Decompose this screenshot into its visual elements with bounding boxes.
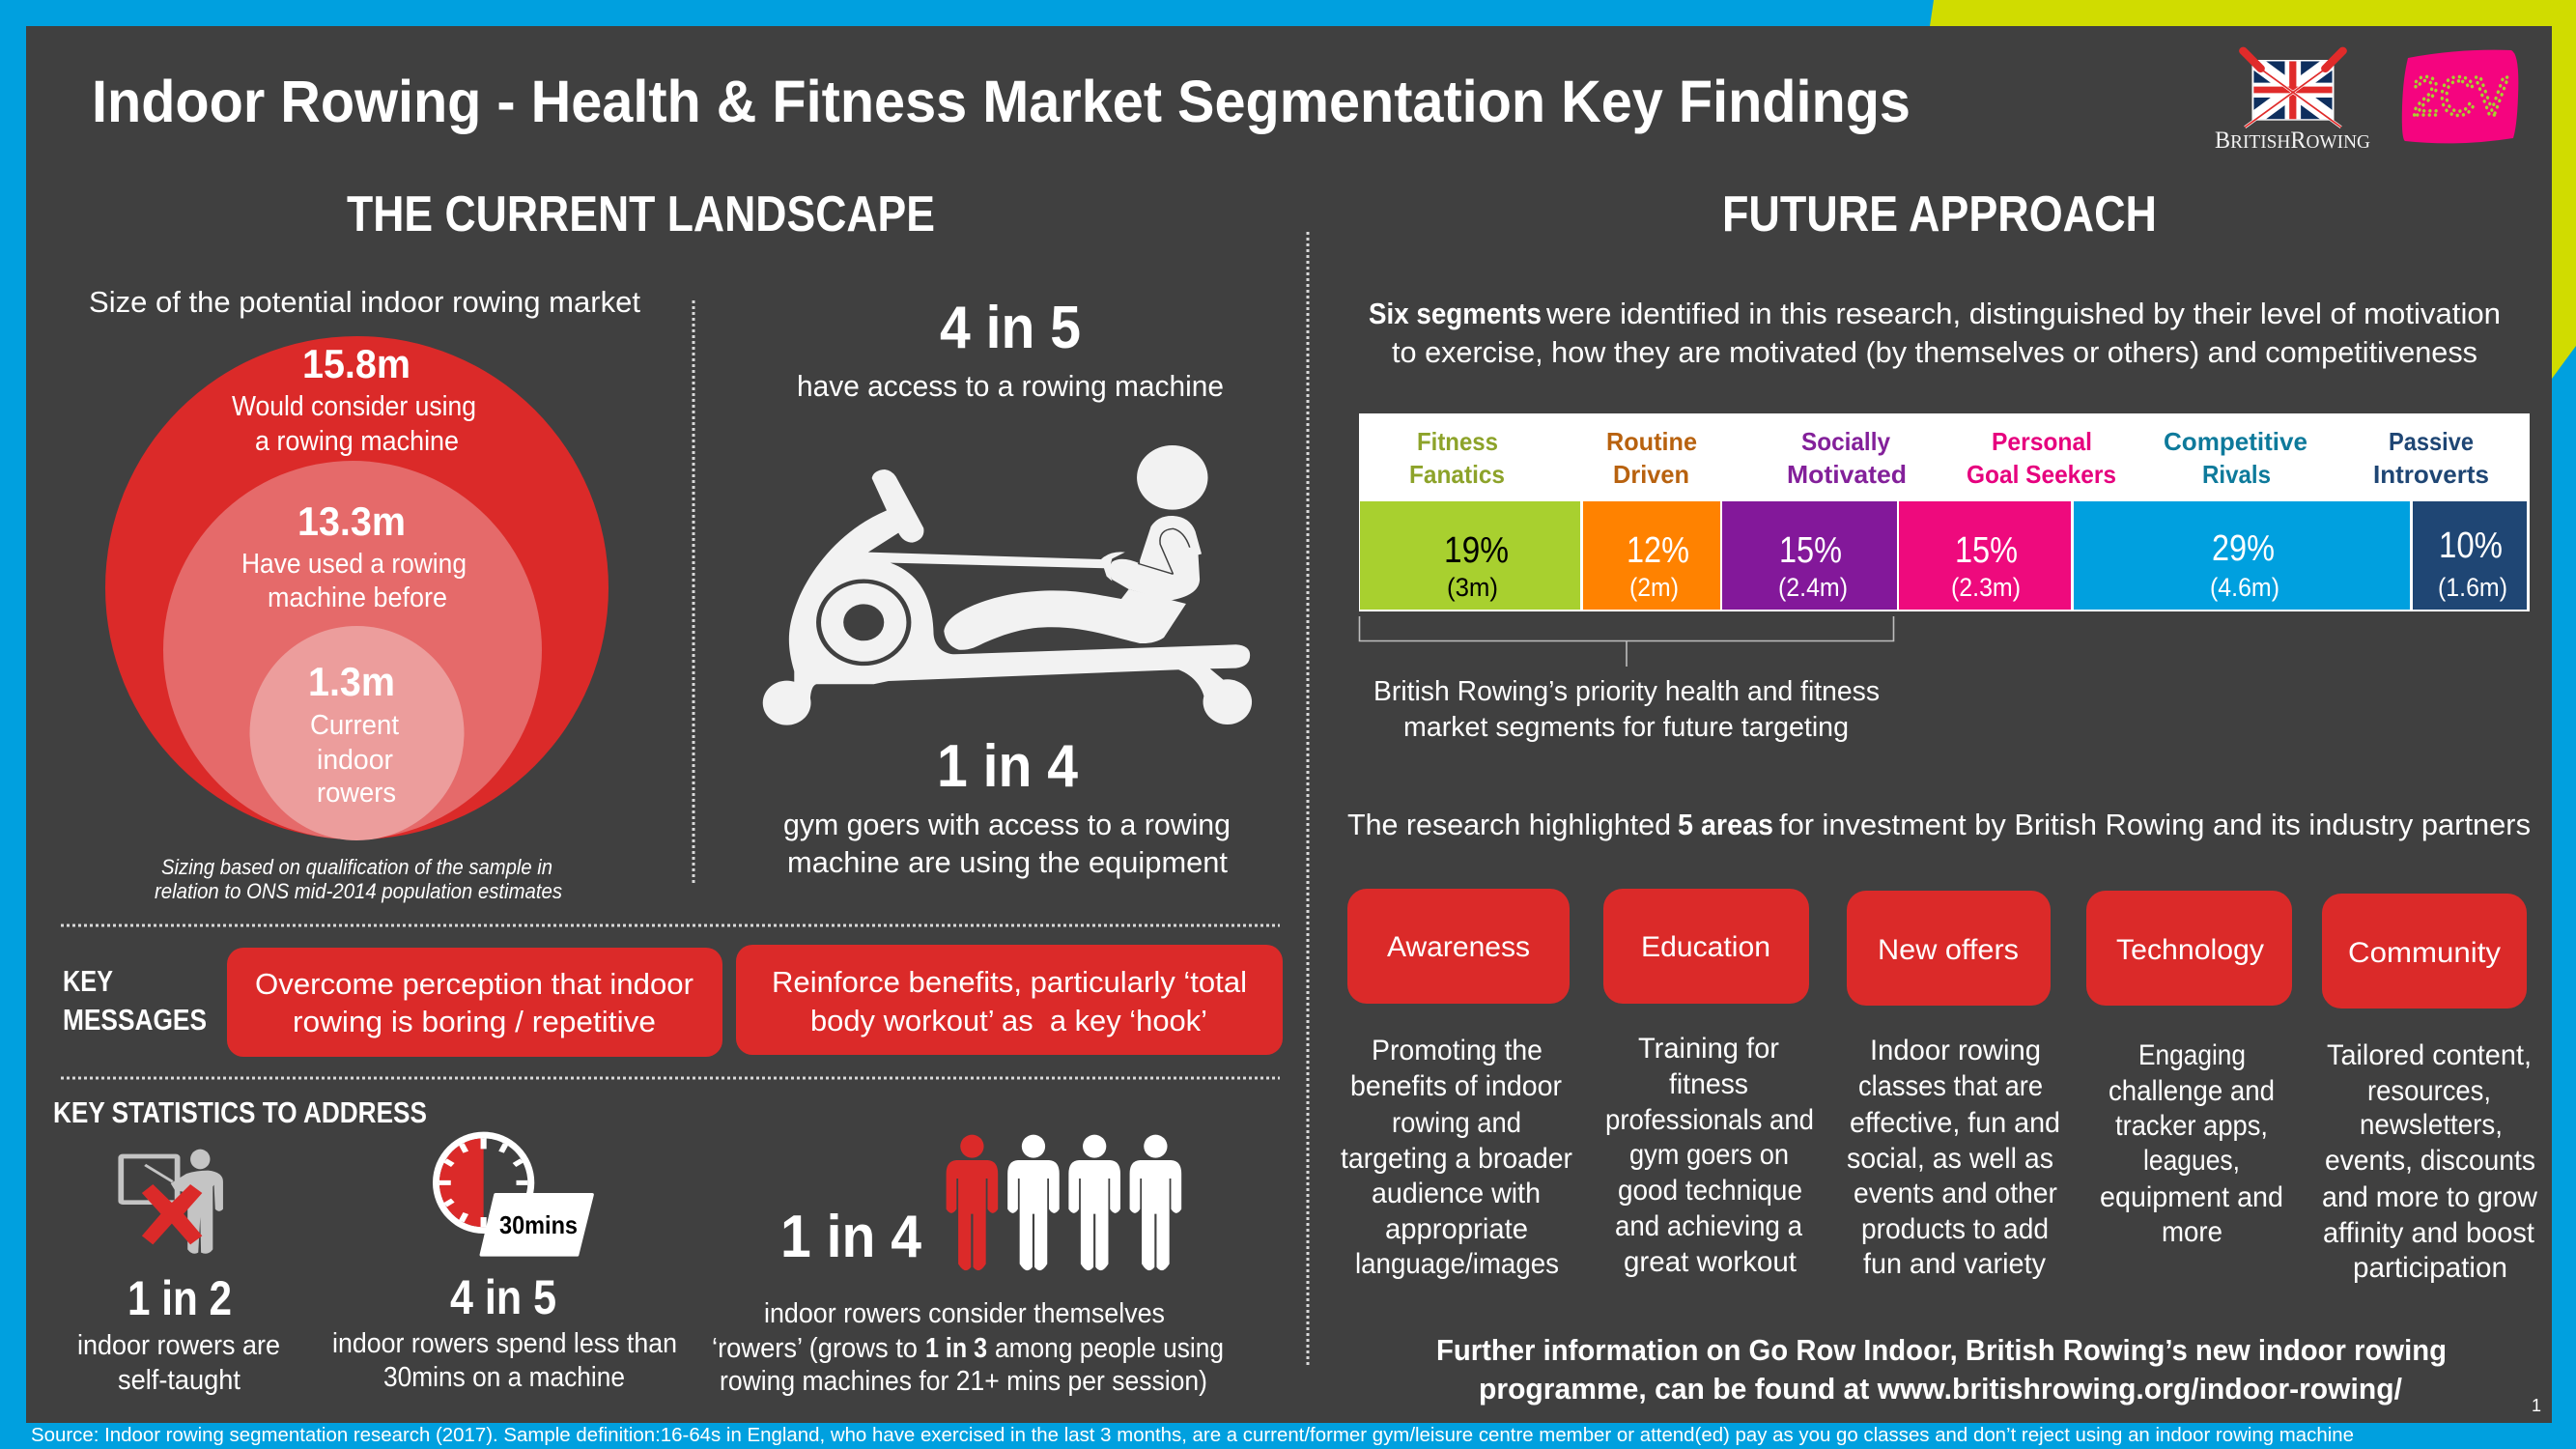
segment: routine driven: 12%: [1627, 530, 1689, 571]
segment: socially motivated: Socially: [1801, 427, 1890, 456]
further information: Further information on Go Row Indoor, British Rowing’s new indoor rowing: [1436, 1333, 2447, 1367]
panel: community: resources,: [2367, 1075, 2491, 1107]
research areas intro: for investment by British Rowing and its industry partners: [1779, 808, 2531, 841]
panel: technology: Technology: [2116, 934, 2264, 966]
panel: awareness: targeting a broader: [1341, 1143, 1572, 1175]
icon: teacher crossed out: [121, 1150, 223, 1254]
footnote: [155, 855, 562, 903]
panel: new offers: classes that are: [1858, 1070, 2043, 1102]
panel: education: [1603, 889, 1814, 1278]
heading: the current landscape: THE CURRENT LANDSCAPE: [347, 186, 935, 242]
stat: 1 in 2 self-taught: [77, 1271, 280, 1396]
circle: 13.3m: 13.3m: [297, 498, 406, 544]
research areas intro: The research highlighted: [1347, 808, 1671, 841]
panel: education: great workout: [1624, 1246, 1798, 1278]
stat: 4 in 5 less than 30mins: indoor rowers spend less than: [332, 1328, 677, 1359]
panel: awareness: [1341, 889, 1572, 1280]
panel: education: professionals and: [1605, 1104, 1814, 1136]
panel: community: newsletters,: [2360, 1109, 2503, 1141]
key message: benefits: body workout’ as a key ‘hook’: [810, 1004, 1207, 1037]
research areas intro: [1347, 808, 2531, 841]
key messages label: KEY: [63, 964, 113, 998]
icon: stopwatch with 30mins tag: 30mins: [499, 1210, 578, 1239]
panel: technology: challenge and: [2109, 1075, 2275, 1107]
key message: boring: Overcome perception that indoor: [255, 967, 694, 1001]
segment: passive introverts: Passive: [2389, 427, 2474, 456]
title: Indoor Rowing - Health & Fitness Market Segmentation Key Findings: [92, 69, 1911, 134]
panel: awareness: language/images: [1355, 1248, 1559, 1280]
circle: 15.8m: 15.8m: [302, 341, 410, 386]
panel: technology: [2086, 891, 2292, 1248]
panel: education: and achieving a: [1615, 1210, 1802, 1242]
segment: routine driven: Driven: [1613, 460, 1689, 489]
further information: programme, can be found at www.britishrowing.org/indoor-rowing/: [1479, 1372, 2402, 1406]
segment: competitive rivals: (4.6m): [2210, 573, 2279, 602]
stat: 1 in 4 gym goers: gym goers with access to a rowing: [783, 808, 1231, 841]
circle: 1.3m: 1.3m: [308, 659, 395, 704]
panel: new offers: social, as well as: [1847, 1143, 2053, 1175]
footnote: Sizing based on qualification of the sample in: [161, 855, 552, 879]
stat: 1 in 4 gym goers: machine are using the equipment: [787, 845, 1228, 879]
key message: benefits: [736, 945, 1283, 1055]
circle: 1.3m: [249, 626, 464, 840]
key messages label: MESSAGES: [63, 1003, 207, 1037]
panel: awareness: Promoting the: [1372, 1035, 1543, 1066]
stat: 1 in 4 consider themselves rowers: indoor rowers consider themselves: [764, 1298, 1165, 1329]
segment: routine driven: (2m): [1629, 573, 1679, 602]
panel: community: [2322, 894, 2537, 1284]
segment: personal goal seekers: Personal: [1992, 427, 2092, 456]
circle: 1.3m: Current: [310, 710, 399, 741]
intro text: six segments: Six segments: [1369, 297, 1542, 330]
icon: four people, one red: [947, 1135, 1181, 1270]
segment: competitive rivals: Competitive: [2164, 427, 2307, 456]
panel: awareness: appropriate: [1385, 1213, 1528, 1245]
stat: 1 in 4 consider themselves rowers: ‘rowers’ (grows to: [712, 1333, 918, 1364]
panel: education: good technique: [1618, 1175, 1802, 1207]
panel: community: Community: [2348, 937, 2501, 969]
stat: 1 in 2 self-taught: indoor rowers are: [77, 1330, 280, 1361]
panel: community: events, discounts: [2325, 1145, 2535, 1177]
further information: [1436, 1333, 2447, 1406]
segment: personal goal seekers: [1899, 427, 2116, 610]
stat: 1 in 4 consider themselves rowers: among people using: [995, 1333, 1224, 1364]
circle: 15.8m: Would consider using: [232, 391, 476, 422]
key message: benefits: Reinforce benefits, particularly ‘total: [772, 965, 1247, 999]
source note: Source: Indoor rowing segmentation research (2017). Sample definition:16-64s in England, who have exercised in the last 3 months, are a current/former gym/leisure centre member or attend(ed) pay as you go classes and don’t reject using an indoor rowing machine: [31, 1425, 2354, 1446]
segment: fitness fanatics: [1360, 427, 1580, 610]
panel: new offers: Indoor rowing: [1870, 1035, 2041, 1066]
key statistics heading: KEY STATISTICS TO ADDRESS: [53, 1095, 427, 1129]
heading: future approach: FUTURE APPROACH: [1722, 186, 2157, 242]
segment: competitive rivals: [2074, 427, 2410, 610]
research areas intro: 5 areas: [1678, 808, 1773, 841]
panel: community: and more to grow: [2322, 1181, 2537, 1213]
segment: fitness fanatics: 19%: [1444, 530, 1509, 571]
panel: education: fitness: [1669, 1068, 1748, 1100]
panel: community: Tailored content,: [2327, 1039, 2532, 1071]
intro text: six segments: to exercise, how they are motivated (by themselves or others) and competitiveness: [1392, 335, 2477, 369]
segment: passive introverts: 10%: [2439, 526, 2503, 566]
circle: 1.3m: indoor: [317, 745, 393, 776]
key messages label: [63, 964, 207, 1037]
stat: 1 in 2 self-taught: self-taught: [118, 1365, 241, 1396]
stat: 4 in 5 access: have access to a rowing machine: [797, 369, 1224, 403]
segment: personal goal seekers: Goal Seekers: [1967, 460, 2116, 489]
key message: boring: [227, 948, 722, 1057]
segment: passive introverts: (1.6m): [2438, 573, 2507, 602]
segment table: [1359, 413, 2530, 611]
footnote: relation to ONS mid-2014 population estimates: [155, 879, 562, 903]
stat: 1 in 4 gym goers: 1 in 4: [937, 733, 1078, 800]
market size subtitle: Size of the potential indoor rowing market: [89, 285, 640, 319]
panel: technology: Engaging: [2138, 1039, 2246, 1071]
panel: technology: leagues,: [2143, 1145, 2240, 1177]
segment: socially motivated: 15%: [1779, 530, 1842, 571]
panel: awareness: rowing and: [1392, 1107, 1521, 1139]
panel: awareness: benefits of indoor: [1350, 1070, 1562, 1102]
page number: 1: [2532, 1396, 2541, 1415]
icon: rowing machine: [763, 445, 1252, 725]
panel: technology: tracker apps,: [2115, 1110, 2268, 1142]
icon: stopwatch with 30mins tag: [433, 1132, 592, 1255]
logo: 2CV: [2402, 50, 2518, 143]
circle: 13.3m: [163, 461, 542, 839]
panel: awareness: Awareness: [1387, 931, 1530, 963]
panel: community: participation: [2353, 1252, 2507, 1284]
segment: routine driven: [1583, 427, 1720, 610]
segment: fitness fanatics: Fitness: [1417, 427, 1498, 456]
segment: socially motivated: [1722, 427, 1907, 610]
circle: 13.3m: machine before: [268, 582, 447, 613]
panel: awareness: audience with: [1372, 1178, 1541, 1209]
panel: technology: more: [2162, 1216, 2222, 1248]
stat: 1 in 2 self-taught: 1 in 2: [127, 1271, 232, 1325]
chart: nested circles of market size: [105, 336, 609, 840]
stat: 1 in 4 consider themselves rowers: 1 in 4: [780, 1204, 921, 1270]
panel: new offers: effective, fun and: [1850, 1107, 2060, 1139]
segment: passive introverts: Introverts: [2373, 460, 2489, 489]
panel: new offers: [1847, 891, 2060, 1280]
bracket and priority segments caption: [1360, 616, 1893, 743]
stat: 4 in 5 less than 30mins: [332, 1270, 677, 1393]
stat: 4 in 5 access: [797, 295, 1224, 403]
segment: personal goal seekers: (2.3m): [1951, 573, 2021, 602]
intro text: six segments: were identified in this research, distinguished by their level of motivation: [1545, 297, 2501, 330]
stat: 4 in 5 less than 30mins: 30mins on a machine: [383, 1362, 625, 1393]
intro text: six segments: [1369, 297, 2501, 369]
panel: new offers: products to add: [1861, 1213, 2049, 1245]
panel: new offers: New offers: [1878, 934, 2019, 966]
logo: British Rowing: [2215, 51, 2370, 154]
panel: education: Training for: [1638, 1033, 1779, 1065]
stat: 4 in 5 less than 30mins: 4 in 5: [450, 1270, 556, 1324]
segment: passive introverts: [2373, 427, 2527, 610]
panel: education: Education: [1641, 931, 1770, 963]
circle: 15.8m: a rowing machine: [255, 426, 459, 457]
segment: competitive rivals: 29%: [2212, 528, 2275, 569]
stat: 1 in 4 consider themselves rowers: 1 in 3: [925, 1333, 987, 1364]
panel: new offers: fun and variety: [1863, 1248, 2046, 1280]
panel: community: affinity and boost: [2323, 1217, 2535, 1249]
panel: education: gym goers on: [1629, 1139, 1789, 1171]
logo: British Rowing: BRITISHROWING: [2215, 128, 2370, 154]
stat: 1 in 4 consider themselves rowers: rowing machines for 21+ mins per session): [720, 1366, 1207, 1397]
stat: 1 in 4 consider themselves rowers: [712, 1135, 1224, 1397]
stat: 1 in 4 gym goers: [783, 733, 1231, 879]
bracket and priority segments caption: market segments for future targeting: [1403, 712, 1849, 743]
key message: boring: rowing is boring / repetitive: [293, 1005, 656, 1038]
logo: 2CV: 2CV: [2412, 66, 2508, 128]
circle: 13.3m: Have used a rowing: [241, 549, 467, 580]
segment: socially motivated: Motivated: [1787, 460, 1907, 489]
segment: fitness fanatics: (3m): [1447, 573, 1498, 602]
segment: fitness fanatics: Fanatics: [1409, 460, 1505, 489]
segment: socially motivated: (2.4m): [1778, 573, 1848, 602]
segment: routine driven: Routine: [1606, 427, 1697, 456]
circle: 15.8m: [105, 336, 609, 839]
segment: personal goal seekers: 15%: [1955, 530, 2018, 571]
circle: 1.3m: rowers: [317, 778, 396, 809]
panel: technology: equipment and: [2100, 1181, 2283, 1213]
bracket and priority segments caption: British Rowing’s priority health and fitness: [1373, 676, 1880, 707]
segment: competitive rivals: Rivals: [2202, 460, 2271, 489]
panel: new offers: events and other: [1854, 1178, 2057, 1209]
stat: 4 in 5 access: 4 in 5: [940, 295, 1081, 361]
